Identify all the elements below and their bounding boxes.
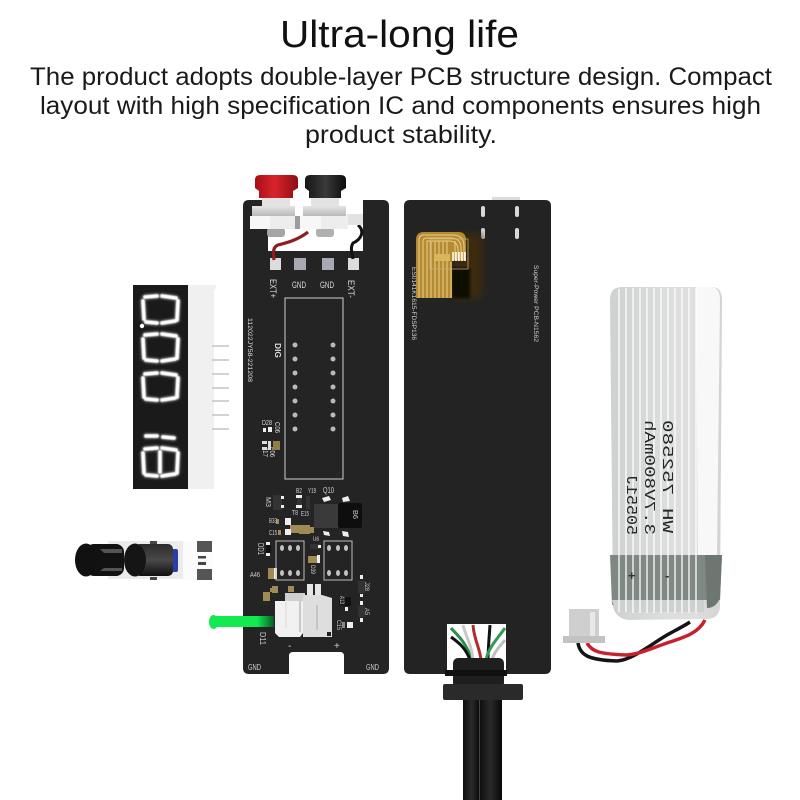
silkscreen labels lower [248, 485, 379, 672]
battery connector [563, 609, 605, 643]
silkscreen labels lower: U6 [313, 537, 320, 543]
silkscreen labels lower: GND [366, 662, 379, 672]
silkscreen labels lower: - [288, 641, 291, 652]
silkscreen labels lower: A46 [250, 572, 260, 579]
silkscreen labels lower: J28 [363, 582, 369, 592]
terminal lug [347, 214, 363, 225]
six-pin footprints [276, 541, 352, 580]
silkscreen labels lower: DD1 [256, 543, 265, 555]
mirrored battery label [622, 420, 675, 535]
silkscreen labels lower: B2 [296, 488, 302, 495]
board text: Super-Power PCB-N1562 [532, 265, 538, 343]
red terminal post [250, 175, 300, 237]
bright wrap side [696, 287, 720, 555]
lower wrap [612, 600, 704, 612]
description text [30, 63, 772, 149]
silkscreen labels lower: B6 [351, 510, 358, 519]
silkscreen labels top: D28 [262, 418, 272, 427]
black terminal post [300, 175, 348, 237]
terminal marks [628, 568, 669, 583]
red wire [273, 232, 308, 260]
silkscreen labels top: F06 [268, 447, 277, 457]
silkscreen labels lower: Y19 [308, 488, 316, 495]
title: Ultra-long life [280, 14, 519, 56]
board outline [243, 200, 389, 674]
panel: rear PCB board [404, 197, 551, 674]
chips and SMD components [263, 495, 365, 628]
white battery connector [275, 584, 332, 637]
silkscreen labels lower: T8 [292, 510, 298, 517]
silkscreen labels lower: GND [248, 662, 261, 672]
black wire [351, 225, 362, 259]
icon: green LED [209, 615, 274, 629]
terminal marks: + [628, 568, 636, 583]
panel: front PCB board [243, 200, 389, 674]
panel: four-digit LED display module [133, 285, 229, 489]
grommet [443, 658, 523, 700]
silkscreen labels top: EXT+ [267, 279, 278, 298]
description text: layout with high specification IC and components ensures high [40, 92, 761, 120]
silkscreen labels top: GND [320, 280, 334, 291]
black cables [463, 700, 502, 800]
flex shadow [454, 234, 482, 298]
silkscreen labels lower: + [334, 641, 340, 652]
silkscreen labels lower: A13 [338, 596, 344, 604]
silkscreen labels lower: Q10 [323, 485, 334, 495]
silkscreen labels lower: C15 [335, 620, 341, 631]
battery body [610, 287, 722, 620]
silkscreen labels lower: M3 [264, 497, 271, 507]
stripes [619, 288, 696, 613]
coloured wires [451, 625, 505, 660]
silkscreen labels top: EXT- [345, 280, 356, 298]
solder pads row [270, 258, 359, 270]
board text: ES0141K1615-FDSP136 [410, 267, 416, 341]
mirrored battery label: 3.7V800mAh [640, 420, 657, 535]
display footprint [285, 298, 343, 479]
battery wires [578, 620, 705, 661]
silkscreen labels top: DIG [273, 343, 283, 358]
silkscreen labels top: J17 [261, 447, 270, 457]
silkscreen labels lower: C15 [269, 530, 277, 537]
description text: The product adopts double-layer PCB structure design. Compact [30, 63, 772, 91]
panel: lithium battery [563, 287, 722, 661]
silkscreen labels lower: E15 [301, 511, 309, 518]
panel: binding post terminals and wires [250, 175, 363, 260]
small components near display [262, 427, 280, 450]
mirrored battery label: WH 752580 [658, 420, 675, 533]
gold flex cable [416, 232, 468, 298]
terminal marks: - [665, 568, 669, 583]
silkscreen labels lower: B33 [269, 518, 277, 525]
description text: product stability. [305, 121, 497, 149]
silkscreen labels top: 112022JY58-221208 [246, 318, 252, 383]
silkscreen labels lower: D11 [258, 632, 267, 645]
slots [481, 206, 519, 239]
silkscreen labels top: GND [292, 280, 306, 291]
board text [410, 265, 538, 343]
board outline [404, 200, 551, 674]
grey negative band [610, 555, 722, 605]
silkscreen labels top: C06 [273, 422, 282, 433]
panel: cable entry with coloured wires [443, 625, 523, 800]
silkscreen labels lower: D39 [309, 565, 315, 575]
mirrored battery label: 50551J [622, 475, 639, 535]
panel: push-button switch module [75, 541, 213, 580]
silkscreen labels top [246, 279, 356, 457]
silkscreen labels lower: A5 [363, 608, 369, 616]
